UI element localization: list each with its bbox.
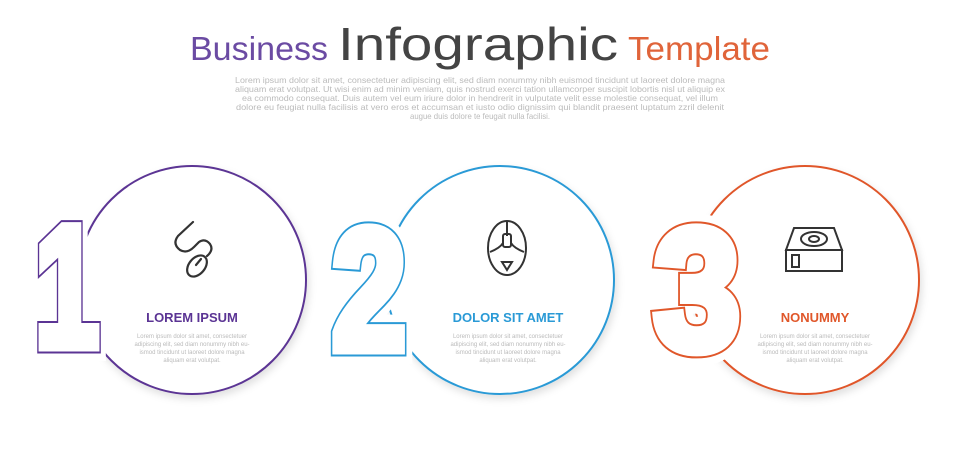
text 3: aliquam erat volutpat. [786, 358, 844, 364]
text 3: adipiscing elit, sed diam nonummy nibh eu- [757, 342, 873, 348]
title: Business [190, 30, 328, 67]
number 1: 1 [35, 191, 99, 383]
intro paragraph: ea commodo consequat. Duis autem vel eum iriure dolor in hendrerit in vulputate velit esse molestie consequat, vel illum [242, 93, 718, 103]
text 2: aliquam erat volutpat. [479, 358, 537, 364]
number 2: 2 [332, 194, 406, 386]
icon: mouse cable [175, 222, 211, 280]
intro paragraph: dolore eu feugiat nulla facilisis at vero eros et accumsan et iusto odio dignissim qui blandit praesent luptatum zzril delenit [236, 102, 725, 112]
icon: mouse [488, 221, 526, 275]
heading 3: NONUMMY [781, 310, 850, 325]
title [190, 18, 770, 70]
number 1: 1 [35, 191, 99, 383]
intro paragraph [235, 75, 726, 121]
text 2: ismod tincidunt ut laoreet dolore magna [455, 350, 561, 356]
number 1: 1 [35, 191, 99, 383]
title: Infographic [338, 18, 618, 70]
text 1: ismod tincidunt ut laoreet dolore magna [139, 350, 245, 356]
text 3: ismod tincidunt ut laoreet dolore magna [762, 350, 868, 356]
number 3: 3 [654, 194, 740, 386]
icon: power supply [786, 228, 842, 271]
heading 1: LOREM IPSUM [146, 310, 238, 325]
text 1: Lorem ipsum dolor sit amet, consectetuer [137, 334, 247, 340]
number 1 [35, 191, 99, 383]
number 2: 2 [332, 194, 406, 386]
intro paragraph: Lorem ipsum dolor sit amet, consectetuer adipiscing elit, sed diam nonummy nibh euismod tincidunt ut laoreet dolore magna [235, 75, 725, 85]
text 1: aliquam erat volutpat. [163, 358, 221, 364]
panel 1 [35, 166, 306, 394]
panel 3 [654, 166, 919, 394]
number 3: 3 [654, 194, 740, 386]
title: Template [628, 30, 770, 67]
number 3: 3 [654, 194, 740, 386]
intro paragraph: augue duis dolore te feugait nulla facilisi. [410, 111, 550, 121]
number 2: 2 [332, 194, 406, 386]
text 3 [757, 334, 873, 364]
text 2 [450, 334, 566, 364]
heading 2: DOLOR SIT AMET [453, 310, 563, 325]
text 3: Lorem ipsum dolor sit amet, consectetuer [760, 334, 870, 340]
text 1 [134, 334, 250, 364]
panel 2 [332, 166, 614, 394]
text 1: adipiscing elit, sed diam nonummy nibh eu- [134, 342, 250, 348]
text 2: Lorem ipsum dolor sit amet, consectetuer [453, 334, 563, 340]
text 2: adipiscing elit, sed diam nonummy nibh eu- [450, 342, 566, 348]
intro paragraph: aliquam erat volutpat. Ut wisi enim ad minim veniam, quis nostrud exerci tation ullamcorper suscipit lobortis nisl ut aliquip ex [235, 84, 726, 94]
